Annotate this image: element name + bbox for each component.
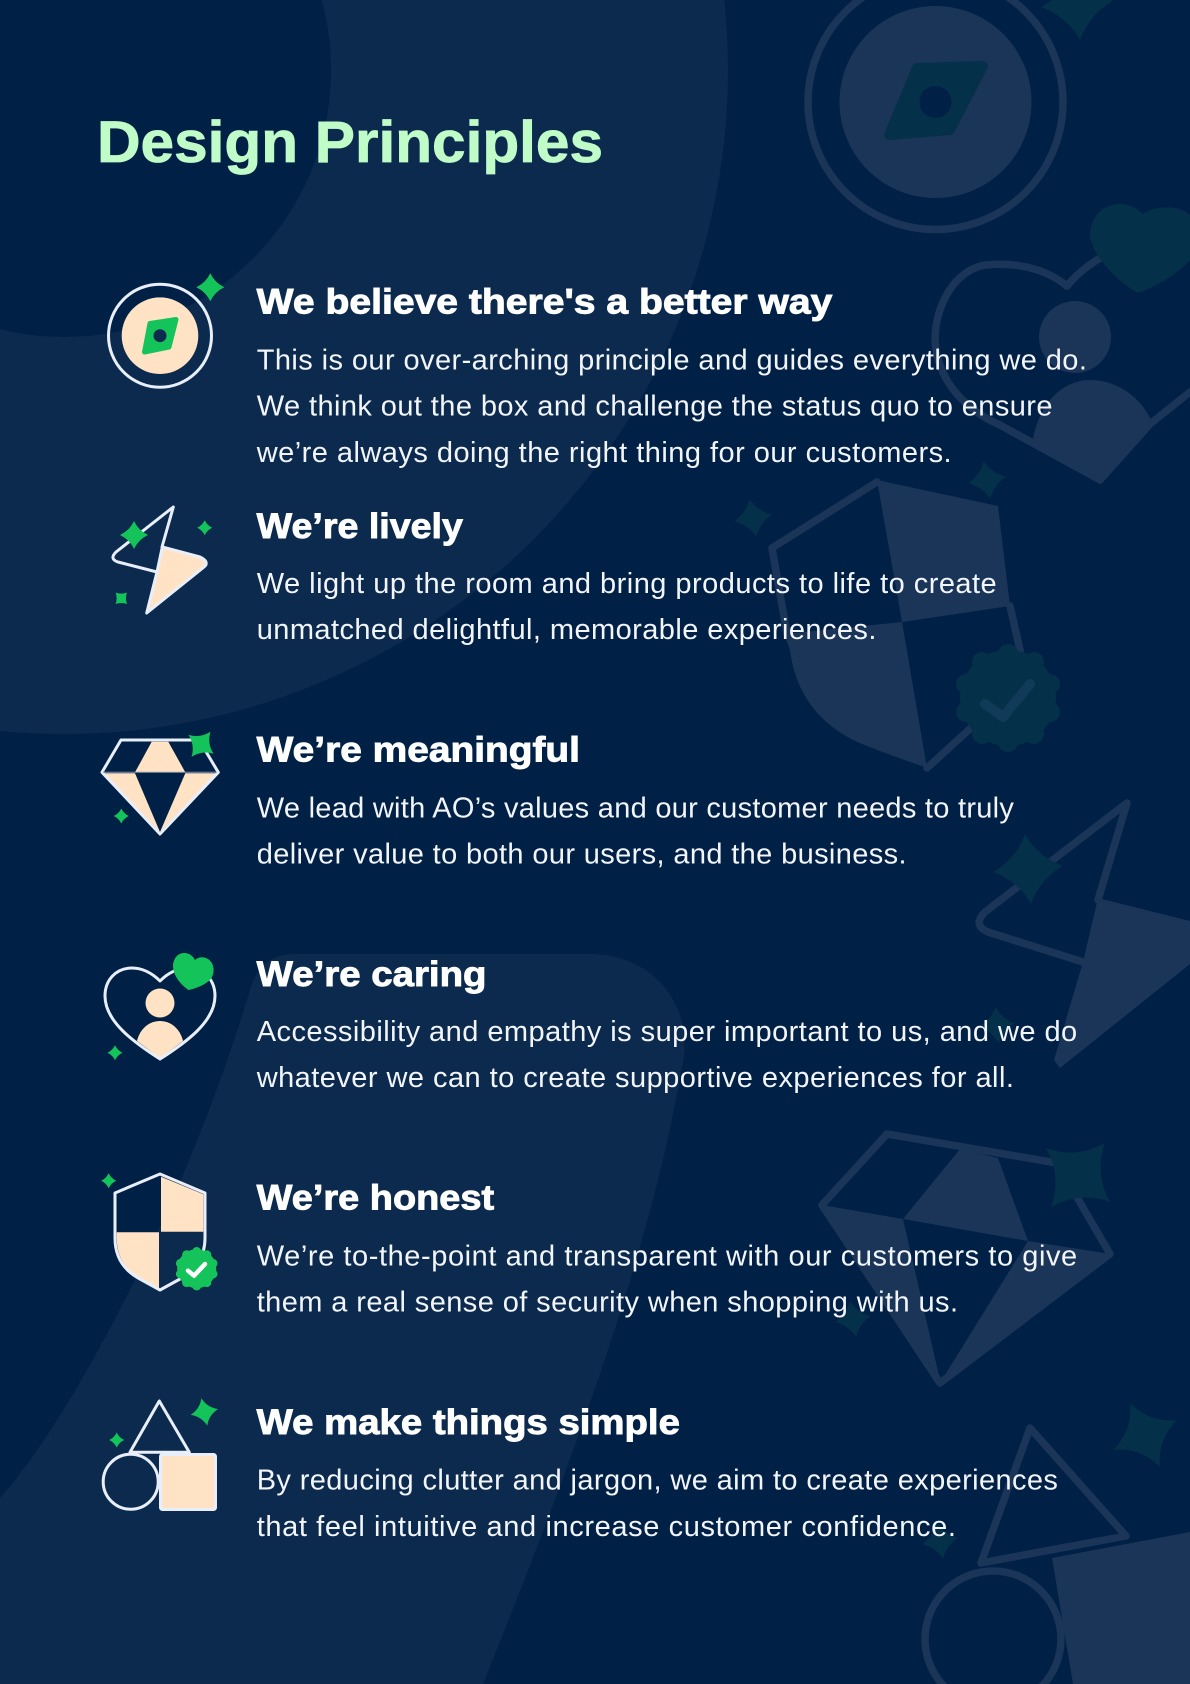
text block: we’re always doing the right thing for our customers. xyxy=(256,437,952,469)
text block: Accessibility and empathy is super important to us, and we do xyxy=(257,1016,1077,1048)
heading: We’re lively xyxy=(257,507,463,546)
text block: By reducing clutter and jargon, we aim to create experiences xyxy=(257,1465,1058,1497)
title: Design Principles xyxy=(97,110,603,175)
heading: We believe there's a better way xyxy=(257,283,833,322)
text block: We think out the box and challenge the status quo to ensure xyxy=(257,391,1052,423)
decorative lightning bolt xyxy=(977,803,1190,1068)
principle: meaningful xyxy=(102,722,1014,871)
decorative heart xyxy=(935,204,1190,480)
text block xyxy=(256,1016,1077,1094)
heading: We’re caring xyxy=(257,955,486,994)
text block: We lead with AO’s values and our customer needs to truly xyxy=(257,792,1014,824)
principle: simple xyxy=(103,1395,1058,1543)
text block: them a real sense of security when shopping with us. xyxy=(257,1286,958,1318)
icon: diamond xyxy=(102,722,223,834)
text block xyxy=(257,568,997,646)
text block xyxy=(256,344,1087,469)
text block: whatever we can to create supportive experiences for all. xyxy=(256,1062,1014,1094)
icon: compass xyxy=(108,273,224,387)
icon: lightning bolt xyxy=(110,507,212,613)
heading: We make things simple xyxy=(257,1403,680,1442)
text block xyxy=(257,1240,1077,1318)
icon: heart with person xyxy=(105,953,215,1060)
principle: better way xyxy=(108,273,1087,469)
text block xyxy=(257,1465,1058,1543)
text block: This is our over-arching principle and guides everything we do. xyxy=(257,344,1087,376)
heading: We’re honest xyxy=(257,1178,494,1217)
text block: We light up the room and bring products to life to create xyxy=(257,568,997,600)
principle: honest xyxy=(101,1173,1077,1318)
decorative shapes xyxy=(919,1388,1190,1684)
decorative shield xyxy=(731,458,1060,768)
principle: lively xyxy=(110,507,997,646)
text block: that feel intuitive and increase customer confidence. xyxy=(257,1511,956,1543)
text block: We’re to-the-point and transparent with our customers to give xyxy=(257,1240,1077,1272)
text block xyxy=(257,792,1014,871)
text block: unmatched delightful, memorable experiences. xyxy=(257,614,876,646)
decorative diamond xyxy=(822,1116,1137,1383)
decorative compass xyxy=(808,0,1116,229)
icon: shield with badge xyxy=(101,1173,218,1290)
text block: deliver value to both our users, and the business. xyxy=(257,839,906,871)
principle: caring xyxy=(105,953,1077,1094)
heading: We’re meaningful xyxy=(257,730,580,770)
background curved band shape xyxy=(0,954,685,1684)
background ring shape xyxy=(0,0,728,734)
icon: shapes xyxy=(103,1395,221,1510)
